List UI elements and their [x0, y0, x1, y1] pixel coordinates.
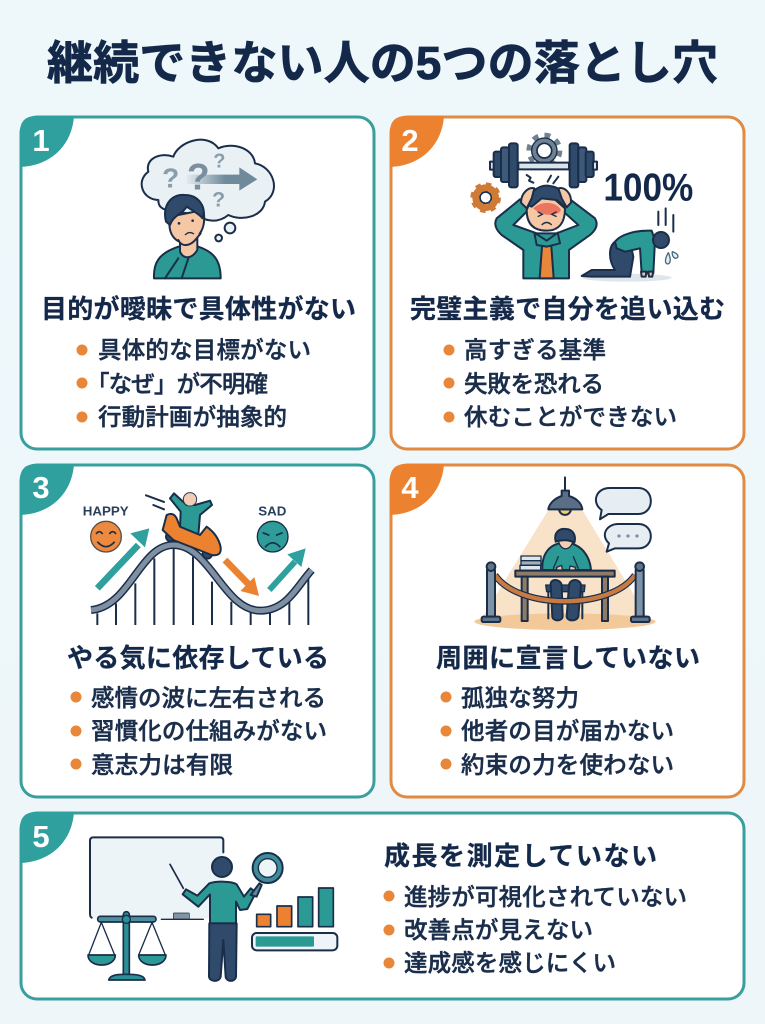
number badge 3 [20, 464, 74, 515]
bullet list 2: 休むことができない [464, 404, 677, 430]
heading 2: 完璧主義で自分を追い込む [410, 294, 725, 324]
bullet list 1 [76, 337, 311, 430]
icon: confused person with thought cloud [142, 140, 274, 278]
number badge 3: 3 [32, 470, 50, 505]
heading 1: 目的が曖昧で具体性がない [41, 294, 356, 324]
arrow: rising teal [97, 528, 149, 588]
icon: emotional rollercoaster: HAPPY [83, 503, 129, 518]
icon: confused person with thought cloud: ? [162, 162, 179, 193]
panel: 3 relying on motivation [20, 464, 374, 797]
arrow: rising teal right [269, 548, 306, 590]
bullet list 4: 孤独な努力 [461, 685, 579, 711]
heading 5: 成長を測定していない [384, 841, 657, 871]
bullet list 1: 行動計画が抽象的 [98, 404, 287, 430]
panel: 5 not measuring growth [20, 812, 744, 999]
number badge 4: 4 [401, 470, 419, 505]
bullet list 4: 他者の目が届かない [461, 718, 674, 744]
icon: barbell, stressed man and collapsed man: 100% [603, 166, 693, 210]
bullet list 2: 高すぎる基準 [464, 337, 606, 363]
icon: confused person with thought cloud: ? [212, 188, 225, 212]
number badge 1 [20, 116, 74, 167]
icon: emotional rollercoaster [83, 493, 312, 625]
arrow: falling orange [225, 560, 259, 596]
panel: 1 goal is vague [20, 116, 374, 449]
panel: 2 perfectionism [390, 116, 744, 449]
bullet list 5: 改善点が見えない [404, 917, 593, 943]
bullet list 5: 達成感を感じにくい [404, 949, 616, 976]
heading 3: やる気に依存している [67, 643, 329, 673]
number badge 2 [390, 116, 444, 167]
bullet list 2 [444, 337, 677, 430]
icon: emotional rollercoaster: SAD [258, 503, 287, 518]
bullet list 5 [384, 884, 687, 976]
bullet list 4: 約束の力を使わない [461, 752, 674, 778]
panel: 4 not declaring to others [390, 464, 744, 797]
bullet list 3: 意志力は有限 [91, 752, 233, 778]
icon: confused person with thought cloud: ? [213, 150, 225, 172]
bullet list 3: 感情の波に左右される [91, 684, 326, 711]
bullet list 3 [70, 684, 327, 778]
bullet list 1: 「なぜ」が不明確 [86, 371, 268, 397]
icon: person at whiteboard with scales, magnifier and chart [88, 837, 337, 981]
icon: isolated person at desk behind rope [474, 477, 656, 630]
number badge 5 [20, 812, 74, 863]
bullet list 2: 失敗を恐れる [464, 371, 604, 397]
bullet list 4 [440, 685, 674, 778]
bullet list 5: 進捗が可視化されていない [404, 884, 687, 910]
number badge 5: 5 [32, 819, 50, 854]
icon: confused person with thought cloud: ? [187, 155, 210, 197]
number badge 4 [390, 464, 444, 515]
icon: barbell, stressed man and collapsed man [476, 137, 693, 282]
number badge 2: 2 [401, 123, 419, 158]
heading 4: 周囲に宣言していない [436, 643, 700, 673]
title: 継続できない人の5つの落とし穴 [47, 37, 718, 89]
bullet list 3: 習慣化の仕組みがない [91, 718, 327, 744]
number badge 1: 1 [32, 123, 50, 158]
bullet list 1: 具体的な目標がない [98, 337, 311, 363]
